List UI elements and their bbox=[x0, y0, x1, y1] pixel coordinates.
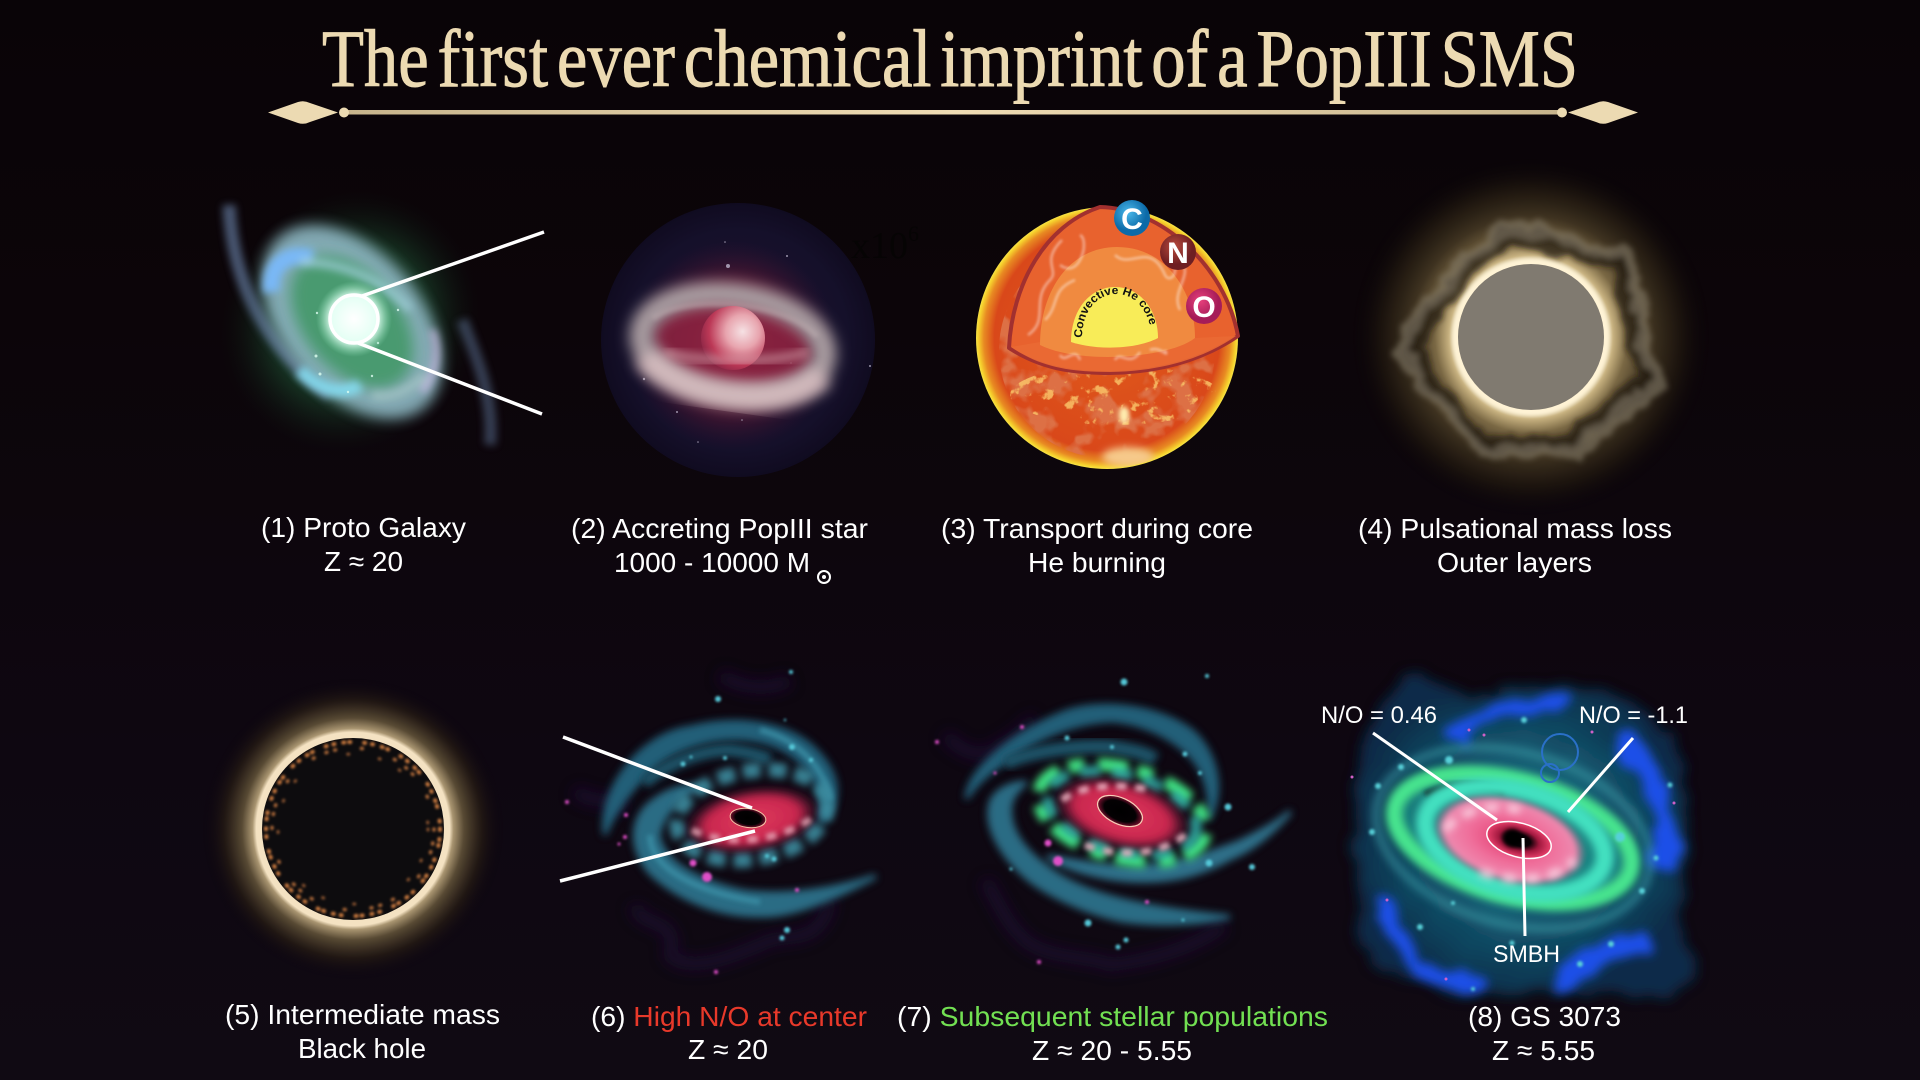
label 2: (2) Accreting PopIII star bbox=[571, 513, 868, 544]
label 4: (4) Pulsational mass loss bbox=[1358, 513, 1672, 544]
galaxy green interior bbox=[266, 233, 438, 411]
arm highlights bbox=[650, 730, 830, 902]
protostar bbox=[701, 306, 765, 370]
label 7: Z ≈ 20 - 5.55 bbox=[1032, 1035, 1192, 1066]
label 7: (7) Subsequent stellar populations bbox=[897, 1001, 1328, 1032]
atom C bbox=[1114, 200, 1150, 236]
convective helium core bbox=[1071, 287, 1158, 348]
atom N bbox=[1160, 234, 1196, 270]
accretion ring bbox=[635, 283, 832, 407]
title: The first ever chemical imprint of a PopIII SMS bbox=[322, 13, 1578, 104]
ember ring bbox=[266, 742, 440, 916]
cyan stars bbox=[1010, 674, 1255, 950]
magenta stars bbox=[935, 725, 1149, 964]
title divider ornament bbox=[268, 101, 1638, 124]
teal ring glow bbox=[1039, 757, 1205, 869]
wedge mid layer bbox=[1040, 247, 1195, 357]
inner turquoise ring bbox=[1413, 768, 1617, 912]
label 3: (3) Transport during core bbox=[941, 513, 1253, 544]
star surface bbox=[976, 207, 1238, 469]
label 3: He burning bbox=[1028, 547, 1166, 578]
galaxy pale disc bbox=[226, 191, 478, 453]
pink bright clumps bbox=[1062, 786, 1185, 853]
star field bbox=[643, 241, 871, 443]
galaxy core bbox=[316, 281, 392, 357]
grey stellar disc bbox=[1458, 264, 1604, 410]
pink disc bbox=[1424, 778, 1596, 902]
annotation: N/O outer: N/O = -1.1 bbox=[1579, 702, 1688, 729]
pink bright clumps bbox=[692, 818, 812, 840]
panel 5: intermediate mass black hole bbox=[203, 679, 503, 979]
label 1 bbox=[261, 512, 466, 577]
ring front band bbox=[665, 352, 808, 360]
second arm bbox=[1005, 747, 1155, 763]
annotation: SMBH: SMBH bbox=[1493, 941, 1560, 968]
label 5: (5) Intermediate mass bbox=[225, 999, 500, 1030]
panel 3: star interior cutaway bbox=[976, 200, 1240, 469]
atom N: N bbox=[1167, 237, 1189, 270]
magenta stars bbox=[1350, 728, 1676, 980]
magenta stars bbox=[565, 800, 799, 974]
spiral arms bbox=[605, 722, 874, 915]
galaxy faint outer arms bbox=[229, 205, 491, 445]
convective wisps bbox=[1028, 235, 1185, 360]
pink bright clumps bbox=[1445, 807, 1575, 879]
zoom circle and lines bbox=[330, 232, 544, 414]
wedge floor bbox=[1011, 336, 1236, 372]
label 1: Z ≈ 20 bbox=[324, 546, 403, 577]
label 8: (8) GS 3073 bbox=[1468, 1001, 1621, 1032]
galaxy green glow bbox=[167, 138, 533, 506]
halo bbox=[203, 679, 503, 979]
dark lane bbox=[1425, 785, 1505, 795]
stars bbox=[1369, 717, 1672, 991]
label 2 bbox=[571, 513, 868, 583]
panel 2: accreting PopIII star bbox=[601, 203, 875, 477]
surface mottling bbox=[999, 286, 1214, 468]
central black hole bbox=[1483, 815, 1555, 865]
green ring bbox=[1380, 750, 1646, 926]
label 4: Outer layers bbox=[1437, 547, 1592, 578]
label 8 bbox=[1468, 1001, 1621, 1066]
panel 4: pulsational mass loss bbox=[1353, 159, 1709, 515]
bright photosphere rim bbox=[1453, 259, 1609, 415]
pink disc bbox=[679, 777, 825, 863]
panel 1: proto galaxy bbox=[167, 138, 544, 506]
central black hole bbox=[729, 806, 767, 830]
cutaway wedge bbox=[1009, 207, 1238, 373]
second arm bbox=[644, 750, 770, 783]
label 4 bbox=[1358, 513, 1672, 578]
core label: Convective He core bbox=[1074, 287, 1156, 338]
pink disc bbox=[1045, 762, 1199, 866]
faint multiplier text: x10 bbox=[851, 225, 908, 267]
faint multiplier text: 6 bbox=[908, 221, 919, 246]
bubble circles bbox=[1541, 734, 1578, 782]
atom O bbox=[1186, 288, 1222, 324]
label 8: Z ≈ 5.55 bbox=[1492, 1035, 1595, 1066]
label 7 bbox=[897, 1001, 1328, 1066]
label 2: 1000 - 10000 M bbox=[614, 547, 810, 578]
disc fill under rings bbox=[1385, 753, 1641, 923]
label 6 bbox=[591, 1001, 867, 1065]
green ring bbox=[1027, 747, 1217, 879]
galaxy stars bbox=[314, 309, 399, 393]
galaxy arm highlights bbox=[271, 256, 436, 396]
ring interior bbox=[643, 292, 823, 398]
atom O: O bbox=[1192, 291, 1216, 324]
annotation: N/O center: N/O = 0.46 bbox=[1321, 702, 1437, 729]
label 6: Z ≈ 20 bbox=[688, 1034, 768, 1065]
label 5: Black hole bbox=[298, 1033, 426, 1064]
label 3 bbox=[941, 513, 1253, 578]
cyan stars bbox=[680, 670, 813, 940]
spiral arms bbox=[967, 706, 1289, 923]
label 1: (1) Proto Galaxy bbox=[261, 512, 466, 543]
dust shell bbox=[1396, 226, 1656, 452]
central black hole bbox=[1093, 789, 1147, 833]
panel 8: GS 3073 bbox=[1321, 677, 1692, 998]
red glow bbox=[650, 251, 818, 440]
zoom lines bbox=[560, 737, 755, 881]
inner teal clumps bbox=[670, 758, 834, 872]
black disc bbox=[262, 738, 444, 920]
atom C: C bbox=[1121, 203, 1143, 236]
panel 7: subsequent stellar populations bbox=[935, 674, 1289, 965]
leader lines bbox=[1373, 733, 1633, 936]
nebula wisps bbox=[575, 675, 830, 964]
outer faint ring bbox=[1356, 719, 1670, 957]
label 6: (6) High N/O at center bbox=[591, 1001, 867, 1032]
nebula wisps bbox=[945, 720, 1225, 965]
teal envelope bbox=[1352, 677, 1692, 998]
panel 6: high N/O galaxy bbox=[560, 670, 874, 974]
label 5 bbox=[225, 999, 500, 1064]
luminous halo bbox=[1353, 159, 1709, 515]
star dark nebula disc bbox=[601, 203, 875, 477]
blue patches bbox=[1385, 700, 1662, 985]
